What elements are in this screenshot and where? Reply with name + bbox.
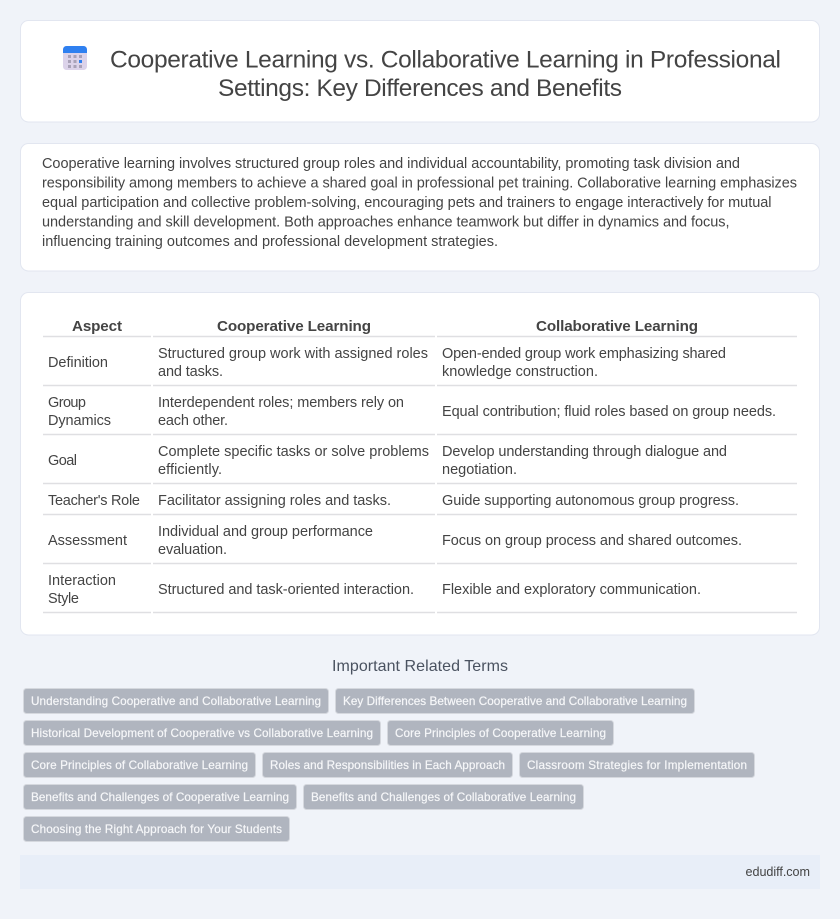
pill: benefits cooperative: Benefits and Challenges of Cooperative Learning	[31, 791, 289, 804]
pill: core principles cooperative	[388, 720, 614, 746]
table row: assessment	[43, 524, 797, 564]
title	[110, 46, 781, 102]
text block: summary: responsibility among members to achieve a shared goal in professional pet training. Collaborative learning emphasizes	[42, 176, 797, 192]
table row: goal: Complete specific tasks or solve problems	[158, 444, 429, 460]
table row: goal: efficiently.	[158, 462, 222, 478]
table row: assessment: Individual and group performance	[158, 524, 373, 540]
table row: teacher's role: Teacher's Role	[48, 493, 140, 509]
table row: teacher's role: Guide supporting autonomous group progress.	[442, 493, 739, 509]
table row: interaction style: Style	[48, 591, 79, 607]
pill: historical development: Historical Development of Cooperative vs Collaborative Learning	[31, 727, 373, 740]
table row: definition	[43, 346, 797, 386]
pill: key differences	[336, 688, 694, 714]
pill: roles and responsibilities: Roles and Responsibilities in Each Approach	[270, 759, 505, 772]
pill: benefits collaborative: Benefits and Challenges of Collaborative Learning	[311, 791, 576, 804]
table row: group dynamics: Equal contribution; fluid roles based on group needs.	[442, 404, 776, 420]
table header row	[43, 318, 797, 336]
icon: calendar	[63, 46, 87, 70]
title: Settings: Key Differences and Benefits	[218, 75, 622, 102]
table row: teacher's role	[43, 493, 797, 514]
pill: understanding: Understanding Cooperative and Collaborative Learning	[31, 695, 321, 708]
text block: summary: influencing training outcomes and professional development strategies.	[42, 234, 498, 250]
table row: assessment: evaluation.	[158, 542, 227, 558]
text block: summary: Cooperative learning involves structured group roles and individual accountability, promoting task division and	[42, 156, 740, 172]
table row: goal: negotiation.	[442, 462, 517, 478]
table row: group dynamics	[43, 395, 797, 434]
text block: summary: equal participation and collective problem-solving, encouraging pets and trainers to engage interactively for mutual	[42, 195, 772, 211]
table row: group dynamics: Group	[48, 395, 86, 411]
table row: group dynamics: Interdependent roles; members rely on	[158, 395, 404, 411]
panel: summary paragraph card	[20, 144, 820, 271]
pill: historical development	[24, 720, 380, 746]
text block: summary: understanding and skill development. Both approaches enhance teamwork but differ in dynamics and focus,	[42, 214, 730, 230]
text block: summary	[42, 156, 797, 250]
table row: interaction style: Structured and task-oriented interaction.	[158, 582, 414, 598]
table header row: Cooperative Learning	[217, 318, 371, 335]
table row: interaction style: Interaction	[48, 573, 116, 589]
pill: understanding	[24, 688, 328, 714]
pill: core principles cooperative: Core Principles of Cooperative Learning	[395, 727, 606, 740]
table header row: Collaborative Learning	[536, 318, 698, 335]
table row: definition: and tasks.	[158, 364, 223, 380]
table row: interaction style: Flexible and exploratory communication.	[442, 582, 701, 598]
panel: header card	[20, 20, 820, 122]
related terms pills	[24, 688, 754, 842]
table row: goal	[43, 444, 797, 484]
table row: group dynamics: Dynamics	[48, 413, 111, 429]
table row: definition: Structured group work with assigned roles	[158, 346, 428, 362]
pill: key differences: Key Differences Between Cooperative and Collaborative Learning	[343, 695, 687, 708]
table row: interaction style	[43, 573, 797, 612]
panel: comparison table card	[20, 292, 820, 635]
table row: definition: Definition	[48, 355, 108, 371]
heading: important related terms: Important Related Terms	[332, 658, 508, 675]
table row: goal: Develop understanding through dialogue and	[442, 444, 727, 460]
table row: teacher's role: Facilitator assigning roles and tasks.	[158, 493, 391, 509]
pill: core principles collaborative: Core Principles of Collaborative Learning	[31, 759, 248, 772]
pill: roles and responsibilities	[262, 752, 512, 778]
footer bar	[20, 855, 820, 889]
pill: benefits collaborative	[304, 784, 584, 810]
table row: definition: Open-ended group work emphasizing shared	[442, 346, 726, 362]
pill: classroom strategies	[520, 752, 754, 778]
table row: definition: knowledge construction.	[442, 364, 598, 380]
table row: group dynamics: each other.	[158, 413, 228, 429]
table row: assessment: Focus on group process and shared outcomes.	[442, 533, 742, 549]
pill: benefits cooperative	[24, 784, 296, 810]
pill: classroom strategies: Classroom Strategies for Implementation	[527, 759, 747, 772]
pill: choosing approach: Choosing the Right Approach for Your Students	[31, 823, 282, 836]
pill: choosing approach	[24, 816, 290, 842]
table row: goal: Goal	[48, 453, 77, 469]
pill: core principles collaborative	[24, 752, 256, 778]
title: Cooperative Learning vs. Collaborative Learning in Professional	[110, 46, 781, 74]
footer text: edudiff.com	[746, 865, 810, 879]
table header row: Aspect	[72, 318, 122, 335]
table row: assessment: Assessment	[48, 533, 127, 549]
